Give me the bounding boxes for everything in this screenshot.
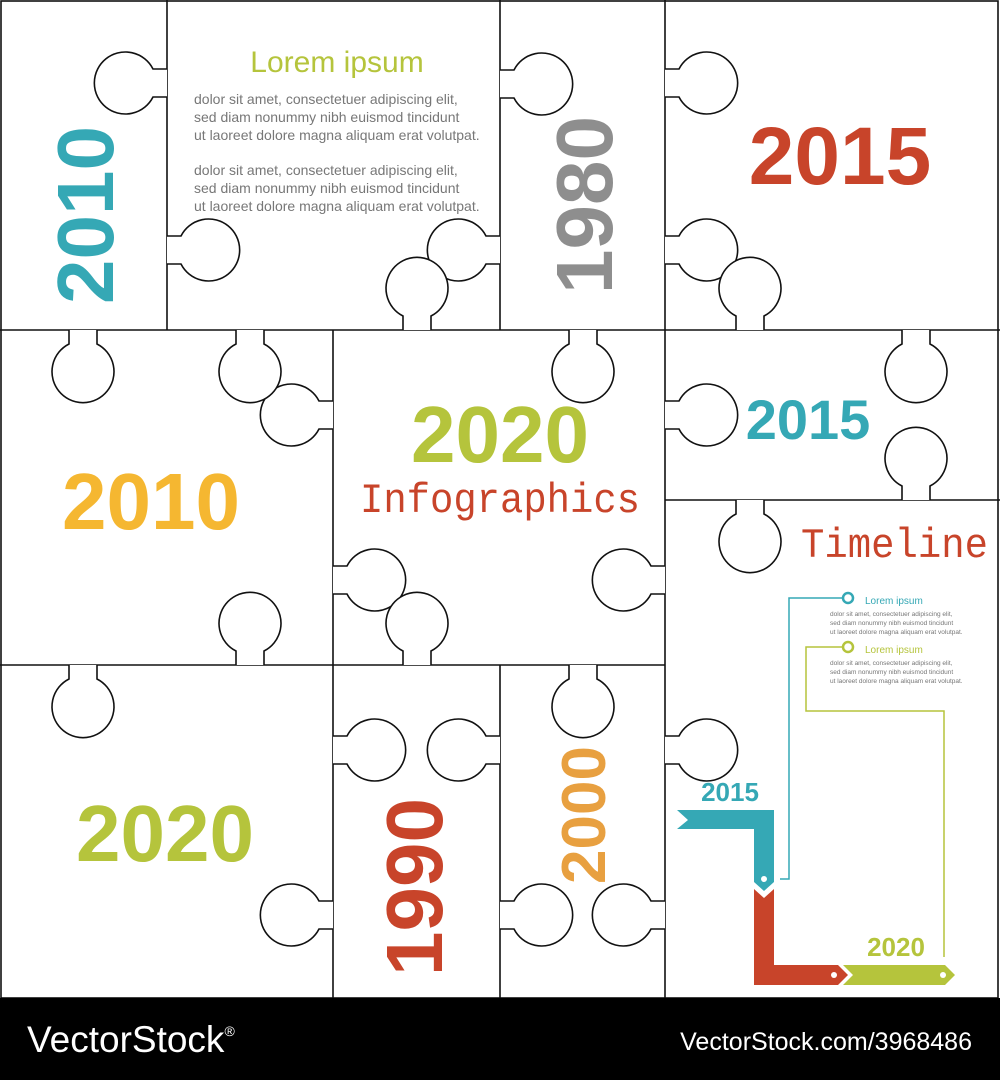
year 2015 teal: 2015 — [746, 388, 870, 451]
ribbons — [677, 810, 774, 891]
top text block: sed diam nonummy nibh euismod tincidunt — [194, 180, 459, 196]
year 1990 vertical red: 1990 — [370, 798, 459, 976]
Infographics label: Infographics — [360, 477, 640, 525]
year 2015 red: 2015 — [749, 111, 931, 202]
year 2000 vertical orange: 2000 — [550, 746, 619, 884]
entry texts: Lorem ipsum — [865, 596, 923, 607]
year 1980 vertical gray: 1980 — [540, 116, 629, 294]
mini timeline — [677, 593, 963, 985]
footer bar: VectorStock — [27, 1019, 224, 1060]
top text block: sed diam nonummy nibh euismod tincidunt — [194, 109, 459, 125]
mini timeline: ut laoreet dolore magna aliquam erat volutpat. — [830, 629, 963, 636]
top text block: dolor sit amet, consectetuer adipiscing elit, — [194, 162, 458, 178]
mini timeline: dolor sit amet, consectetuer adipiscing elit, — [830, 660, 953, 667]
mini timeline: 2015 — [701, 777, 759, 807]
mini timeline: dolor sit amet, consectetuer adipiscing elit, — [830, 611, 953, 618]
top text block: dolor sit amet, consectetuer adipiscing elit, — [194, 91, 458, 107]
year 2010 vertical teal: 2010 — [41, 126, 130, 304]
center 2020: 2020 — [411, 390, 589, 479]
top text block — [194, 46, 480, 214]
top text block: ut laoreet dolore magna aliquam erat volutpat. — [194, 127, 480, 143]
top text block: ut laoreet dolore magna aliquam erat volutpat. — [194, 198, 480, 214]
Timeline label: Timeline — [801, 522, 988, 570]
footer bar — [0, 998, 1000, 1080]
footer bar: ® — [224, 1023, 235, 1039]
mini timeline: 2020 — [867, 932, 925, 962]
mini timeline: sed diam nonummy nibh euismod tincidunt — [830, 669, 953, 676]
year 2020 green: 2020 — [76, 789, 254, 878]
year 2010 yellow: 2010 — [62, 457, 240, 546]
mini timeline: ut laoreet dolore magna aliquam erat volutpat. — [830, 678, 963, 685]
top text block: Lorem ipsum — [250, 46, 424, 79]
connector lines — [780, 593, 944, 957]
mini timeline: sed diam nonummy nibh euismod tincidunt — [830, 620, 953, 627]
footer bar: VectorStock.com/3968486 — [680, 1028, 972, 1056]
mini timeline: Lorem ipsum — [865, 645, 923, 656]
